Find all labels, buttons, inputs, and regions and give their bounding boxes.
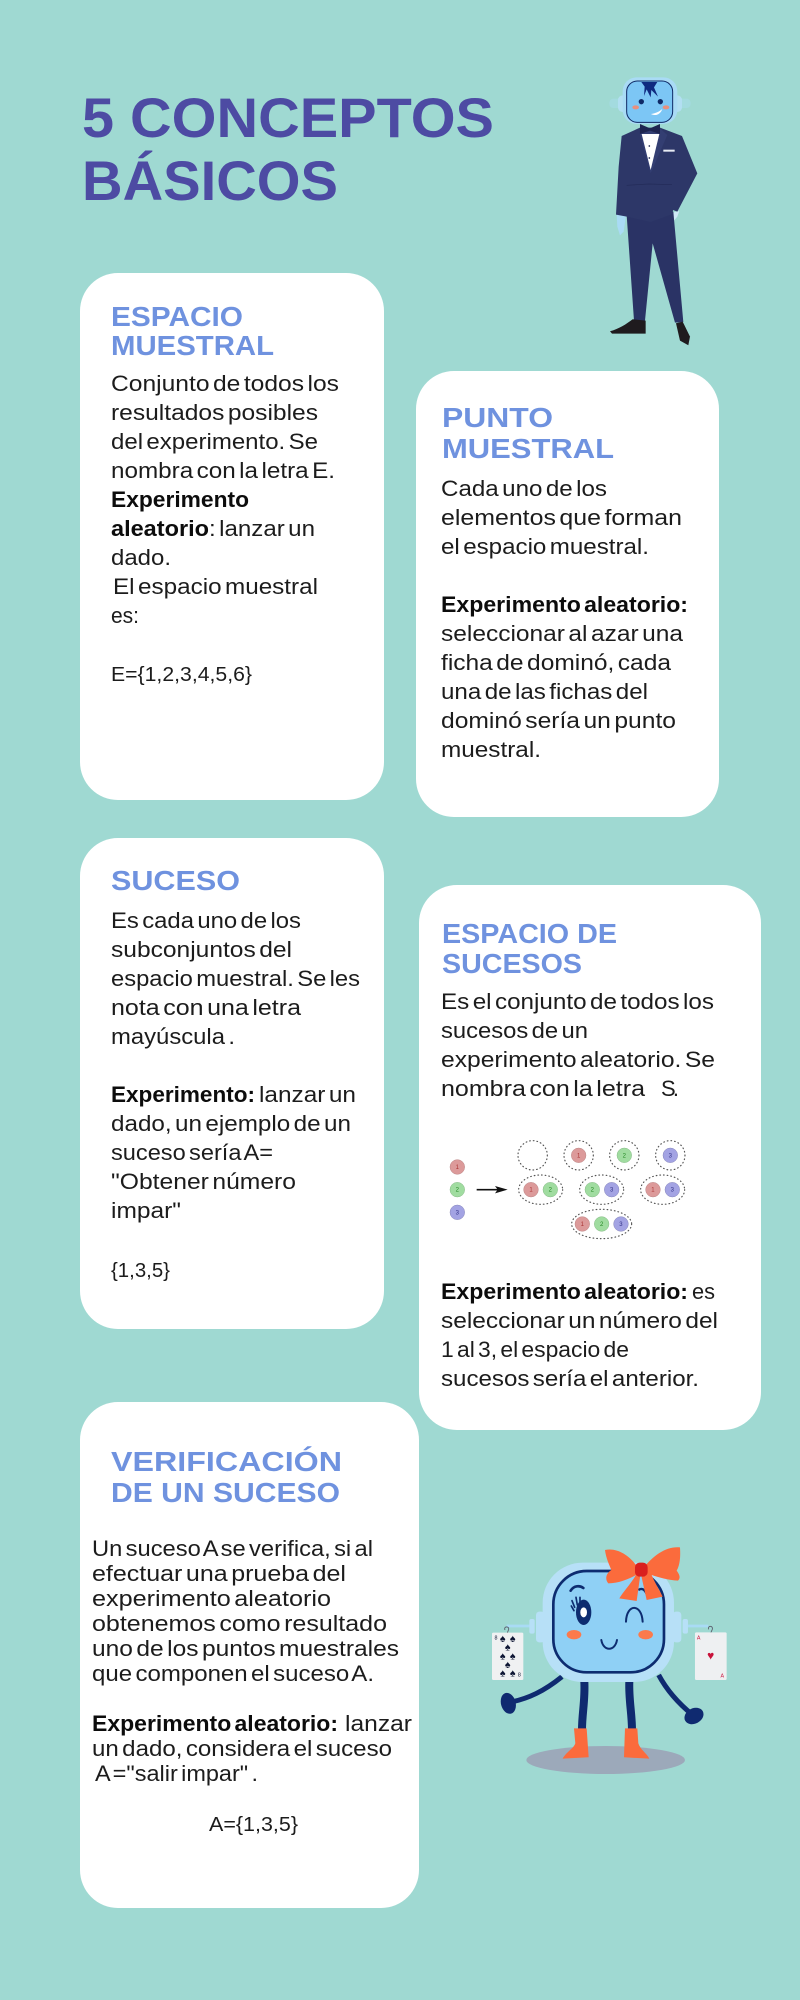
text: verificación definition: A={1,3,5} <box>209 1813 298 1836</box>
text: espacio de sucesos example: seleccionar un número del <box>441 1308 718 1333</box>
icon: robot girl holding cards: ♥ <box>707 1648 714 1662</box>
text: espacio muestral definition: Experimento <box>111 487 249 512</box>
text: espacio de sucesos definition: nombra con la letra <box>441 1076 646 1101</box>
text: suceso definition: Es cada uno de los <box>111 908 301 933</box>
text: punto muestral definition: Experimento aleatorio: <box>441 592 688 617</box>
text: verificación definition <box>92 1536 412 1836</box>
text: espacio de sucesos definition: experimento aleatorio. Se <box>441 1047 715 1072</box>
text: verificación definition: Experimento aleatorio: <box>92 1711 338 1736</box>
panel: verificación de un suceso <box>80 1402 419 1908</box>
icon: robot girl holding cards: A <box>697 1635 701 1641</box>
text: punto muestral definition: elementos que forman <box>441 505 682 530</box>
diagram: set of subsets of 1, 2, 3: 1 <box>577 1153 581 1159</box>
diagram: set of subsets of 1, 2, 3: 3 <box>610 1188 614 1194</box>
text: verificación definition: uno de los puntos muestrales <box>92 1636 399 1661</box>
panel: espacio muestral <box>80 273 384 800</box>
text: punto muestral definition: ficha de dominó, cada <box>441 650 672 675</box>
text: punto muestral definition <box>441 476 688 762</box>
diagram: set of subsets of 1, 2, 3: 3 <box>619 1222 623 1228</box>
diagram: set of subsets of 1, 2, 3: 1 <box>651 1188 655 1194</box>
title: BÁSICOS <box>82 149 338 212</box>
heading: verificación de un suceso: DE UN SUCESO <box>111 1477 340 1508</box>
heading: verificación de un suceso <box>111 1446 342 1508</box>
diagram: set of subsets of 1, 2, 3: 2 <box>591 1188 595 1194</box>
diagram: set of subsets of 1, 2, 3: 2 <box>456 1188 460 1194</box>
heading: espacio muestral: MUESTRAL <box>111 330 274 361</box>
icon: robot girl holding cards: ♠ <box>500 1668 506 1680</box>
icon: robot girl holding cards: ♠ <box>510 1668 516 1680</box>
text: espacio muestral definition: del experimento. Se <box>111 429 318 454</box>
text: espacio muestral definition: dado. <box>111 545 171 570</box>
icon: robot girl holding cards: ♠ <box>510 1633 516 1645</box>
heading: espacio muestral <box>111 301 274 361</box>
text: verificación definition: Un suceso A se verifica, si al <box>92 1536 373 1561</box>
text: suceso definition: subconjuntos del <box>111 937 292 962</box>
icon: robot girl holding cards: ♠ <box>500 1650 506 1662</box>
text: espacio de sucesos example <box>441 1279 718 1391</box>
text: suceso definition: "Obtener número <box>111 1169 296 1194</box>
heading: suceso: SUCESO <box>111 865 240 896</box>
diagram: set of subsets of 1, 2, 3: 1 <box>456 1165 460 1171</box>
text: suceso definition: lanzar un <box>259 1082 356 1107</box>
heading: punto muestral <box>442 402 614 464</box>
icon: robot man in tuxedo <box>609 77 697 345</box>
text: espacio muestral definition: Conjunto de todos los <box>111 371 339 396</box>
heading: espacio muestral: ESPACIO <box>111 301 243 332</box>
text: espacio muestral definition: El espacio muestral <box>113 574 318 599</box>
text: suceso definition: mayúscula . <box>111 1024 235 1049</box>
heading: espacio de sucesos: SUCESOS <box>442 948 582 979</box>
text: espacio muestral definition <box>111 371 339 686</box>
text: punto muestral definition: el espacio muestral. <box>441 534 649 559</box>
text: espacio de sucesos example: Experimento aleatorio: <box>441 1279 688 1304</box>
icon: robot girl holding cards: A <box>721 1673 725 1679</box>
text: punto muestral definition: Cada uno de los <box>441 476 607 501</box>
text: espacio muestral definition: nombra con la letra E. <box>111 458 335 483</box>
text: espacio de sucesos definition: sucesos de un <box>441 1018 588 1043</box>
text: verificación definition: efectuar una prueba del <box>92 1561 346 1586</box>
text: espacio de sucesos definition: S. <box>661 1076 679 1101</box>
icon: robot girl holding cards: 8 <box>518 1673 521 1679</box>
diagram: set of subsets of 1, 2, 3: 2 <box>600 1222 604 1228</box>
text: espacio muestral definition: E={1,2,3,4,5,6} <box>111 663 252 686</box>
icon: robot girl holding cards: ♠ <box>505 1659 511 1671</box>
text: verificación definition: que componen el suceso A. <box>92 1661 374 1686</box>
text: suceso definition: suceso sería A= <box>111 1140 273 1165</box>
icon: robot girl holding cards: ♠ <box>505 1642 511 1654</box>
text: verificación definition: A ="salir impar" . <box>95 1761 258 1786</box>
diagram: set of subsets of 1, 2, 3: 3 <box>671 1188 675 1194</box>
text: suceso definition: dado, un ejemplo de un <box>111 1111 351 1136</box>
text: suceso definition: {1,3,5} <box>111 1259 170 1282</box>
text: espacio de sucesos definition: Es el conjunto de todos los <box>441 989 714 1014</box>
heading: espacio de sucesos <box>442 918 617 979</box>
icon: robot girl holding cards <box>492 1547 727 1774</box>
text: suceso definition: espacio muestral. Se les <box>111 966 360 991</box>
diagram: set of subsets of 1, 2, 3: 2 <box>549 1188 553 1194</box>
diagram: set of subsets of 1, 2, 3: 2 <box>623 1153 627 1159</box>
text: verificación definition: experimento aleatorio <box>92 1586 331 1611</box>
text: suceso definition: Experimento: <box>111 1082 255 1107</box>
text: punto muestral definition: una de las fichas del <box>441 679 648 704</box>
diagram: set of subsets of 1, 2, 3: 1 <box>529 1188 533 1194</box>
icon: robot girl holding cards: 8 <box>495 1635 498 1641</box>
diagram: set of subsets of 1, 2, 3 <box>450 1141 685 1239</box>
text: punto muestral definition: muestral. <box>441 737 541 762</box>
text: suceso definition: impar" <box>111 1198 181 1223</box>
heading: punto muestral: MUESTRAL <box>442 433 614 464</box>
panel: suceso <box>80 838 384 1329</box>
title: 5 CONCEPTOS <box>82 86 494 149</box>
text: punto muestral definition: dominó sería un punto <box>441 708 676 733</box>
text: verificación definition: obtenemos como resultado <box>92 1611 387 1636</box>
diagram: set of subsets of 1, 2, 3: 1 <box>581 1222 585 1228</box>
text: verificación definition: lanzar <box>345 1711 412 1736</box>
icon: robot girl holding cards: ♠ <box>510 1650 516 1662</box>
text: espacio de sucesos definition <box>441 989 715 1101</box>
text: espacio muestral definition: resultados posibles <box>111 400 318 425</box>
diagram: set of subsets of 1, 2, 3: 3 <box>669 1153 673 1159</box>
text: punto muestral definition: seleccionar al azar una <box>441 621 684 646</box>
text: espacio de sucesos example: es <box>692 1279 715 1304</box>
title <box>82 86 494 212</box>
heading: punto muestral: PUNTO <box>442 402 553 433</box>
heading: verificación de un suceso: VERIFICACIÓN <box>111 1446 342 1477</box>
panel: espacio de sucesos <box>419 885 761 1430</box>
text: espacio de sucesos example: 1 al 3, el espacio de <box>441 1337 629 1362</box>
text: suceso definition <box>111 908 360 1282</box>
text: espacio de sucesos example: sucesos sería el anterior. <box>441 1366 699 1391</box>
text: suceso definition: nota con una letra <box>111 995 302 1020</box>
heading: espacio de sucesos: ESPACIO DE <box>442 918 617 949</box>
panel: punto muestral <box>416 371 719 817</box>
text: espacio muestral definition: : lanzar un <box>209 516 315 541</box>
text: verificación definition: un dado, considera el suceso <box>92 1736 392 1761</box>
text: espacio muestral definition: aleatorio <box>111 516 209 541</box>
icon: robot girl holding cards: ♠ <box>500 1633 506 1645</box>
text: espacio muestral definition: es: <box>111 603 139 628</box>
diagram: set of subsets of 1, 2, 3: 3 <box>456 1210 460 1216</box>
